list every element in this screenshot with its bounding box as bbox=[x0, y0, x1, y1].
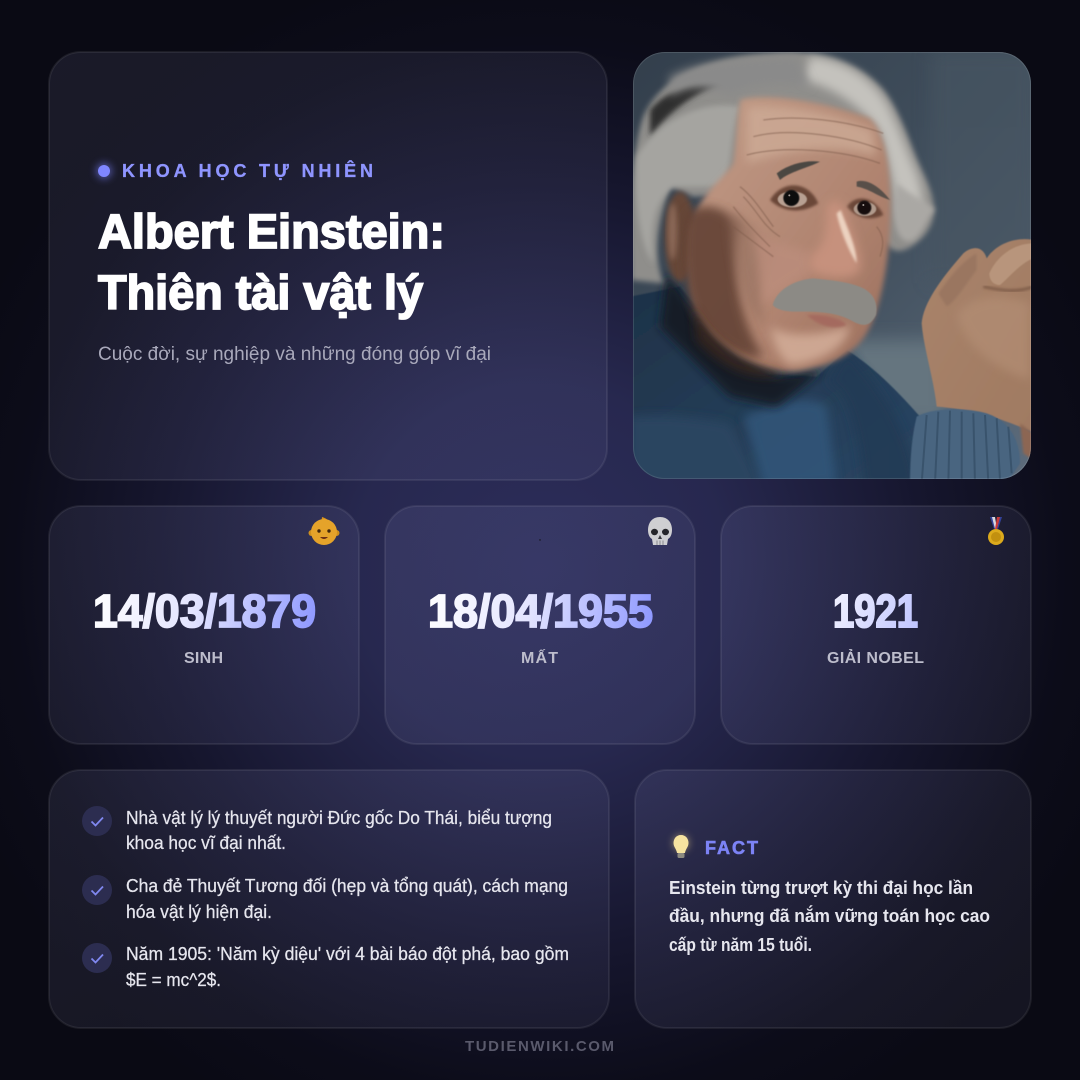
icon: medal bbox=[988, 517, 1004, 545]
brows bbox=[777, 161, 820, 180]
panel: birth stat bbox=[49, 506, 359, 744]
mustache bbox=[773, 278, 877, 325]
bullet 3: $E = mc^2$. bbox=[126, 970, 221, 990]
sweater cuff bbox=[910, 409, 1020, 483]
panel: key points bbox=[49, 770, 609, 1028]
title bbox=[98, 206, 445, 320]
bullet 2 bbox=[82, 875, 568, 922]
panel: death stat bbox=[385, 506, 695, 744]
icon: baby bbox=[308, 517, 340, 545]
bullet 2: hóa vật lý hiện đại. bbox=[126, 902, 272, 922]
nobel year: 1921 bbox=[833, 585, 918, 637]
panel: nobel stat bbox=[721, 506, 1031, 744]
bullet 1 bbox=[82, 806, 552, 853]
nose bbox=[810, 201, 861, 277]
birth date: 14/03/1879 bbox=[93, 585, 316, 637]
bullet 1: khoa học vĩ đại nhất. bbox=[126, 833, 286, 853]
title: Albert Einstein: bbox=[98, 206, 445, 259]
forehead wrinkles bbox=[733, 118, 883, 257]
face bbox=[689, 97, 890, 371]
fact text: cấp từ năm 15 tuổi. bbox=[669, 935, 812, 955]
footer brand: TUDIENWIKI.COM bbox=[465, 1038, 614, 1055]
panel: hero title card bbox=[49, 52, 607, 480]
death date: 18/04/1955 bbox=[428, 585, 653, 637]
bullet 1: Nhà vật lý lý thuyết người Đức gốc Do Thái, biểu tượng bbox=[126, 808, 552, 828]
panel: fact bbox=[635, 770, 1031, 1028]
icon: light bulb bbox=[673, 835, 689, 858]
fact text bbox=[669, 878, 990, 955]
bullet 2: Cha đẻ Thuyết Tương đối (hẹp và tổng quát), cách mạng bbox=[126, 876, 568, 896]
ear bbox=[665, 192, 695, 282]
birth label: SINH bbox=[184, 650, 223, 667]
sweater bbox=[630, 287, 920, 493]
bullet 3: Năm 1905: 'Năm kỳ diệu' với 4 bài báo đột phá, bao gồm bbox=[126, 944, 569, 964]
subtitle: Cuộc đời, sự nghiệp và những đóng góp vĩ đại bbox=[98, 344, 491, 365]
mouth bbox=[807, 315, 847, 327]
nobel label: GIẢI NOBEL bbox=[827, 648, 924, 667]
hair bbox=[631, 52, 934, 283]
fact heading: FACT bbox=[705, 838, 758, 858]
bullet 3 bbox=[82, 943, 569, 990]
category tag: KHOA HỌC TỰ NHIÊN bbox=[122, 160, 373, 181]
death label: MẤT bbox=[521, 648, 558, 667]
hands bbox=[922, 239, 1035, 433]
fact text: đầu, nhưng đã nắm vững toán học cao bbox=[669, 905, 990, 926]
title: Thiên tài vật lý bbox=[98, 267, 423, 320]
icon: skull bbox=[648, 517, 672, 545]
neck shadow bbox=[660, 273, 823, 407]
eyes bbox=[770, 185, 883, 218]
fact text: Einstein từng trượt kỳ thi đại học lần bbox=[669, 878, 973, 898]
portrait photo bbox=[630, 50, 1037, 493]
